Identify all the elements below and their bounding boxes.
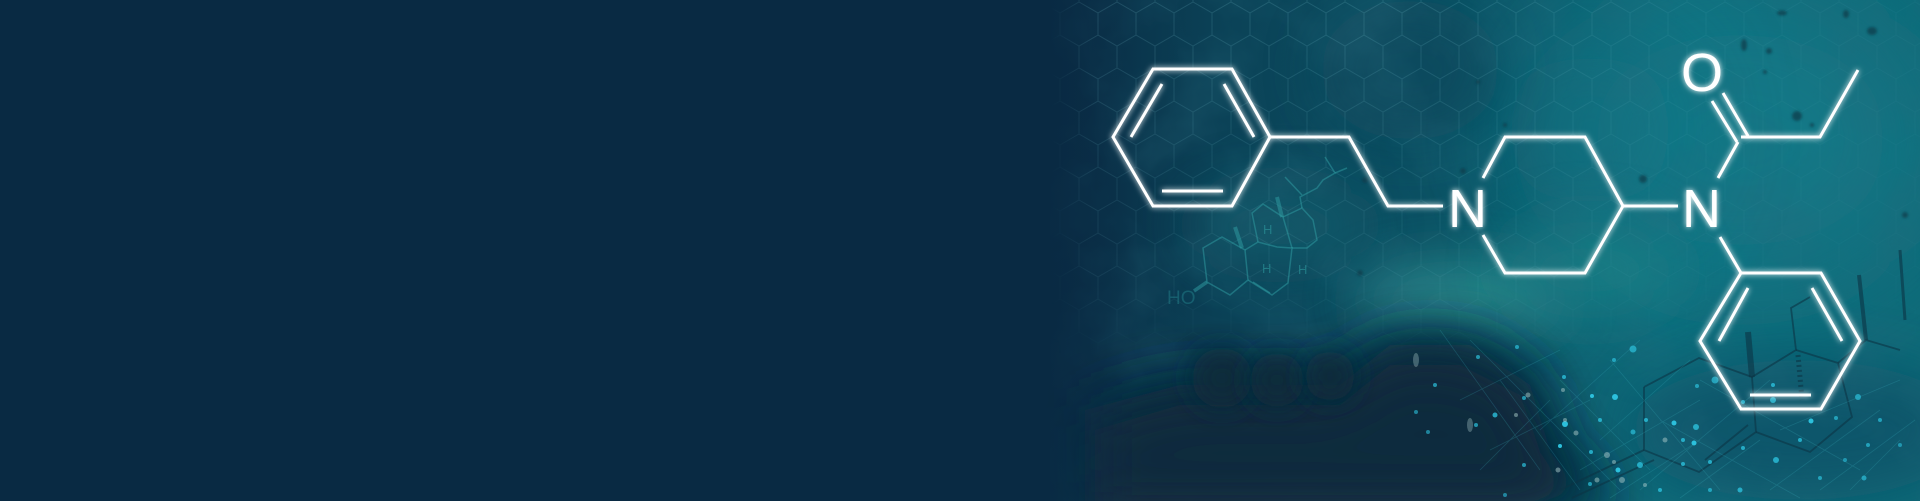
- ethyl linker: [1270, 137, 1443, 206]
- teal smoke background: [1050, 0, 1920, 501]
- dark background molecule: [1560, 250, 1905, 498]
- pale particle highlights: [1413, 353, 1668, 487]
- steroid atom labels: H: [1263, 222, 1272, 237]
- atom labels: [1448, 43, 1723, 239]
- atom labels: N: [1448, 179, 1487, 239]
- steroid atom labels: HO: [1167, 288, 1196, 309]
- propionyl chain: [1741, 70, 1858, 137]
- dark smoke cloud: [1085, 345, 1610, 501]
- bond to lower phenyl: [1720, 237, 1741, 273]
- steroid atom labels: H: [1262, 261, 1271, 276]
- dark specks: [1357, 10, 1908, 276]
- atom labels: O: [1681, 43, 1723, 103]
- particle dots: [1414, 345, 1902, 497]
- faded steroid molecule: [1167, 157, 1347, 309]
- piperidine ring: [1483, 137, 1623, 273]
- amide bond: [1718, 142, 1738, 178]
- banner illustration: [1061, 0, 1920, 501]
- steroid atom labels: H: [1298, 262, 1307, 277]
- carbonyl double bond: [1712, 93, 1748, 142]
- left edge fade into navy: [1040, 0, 1140, 501]
- phenyl ring left: [1113, 69, 1270, 206]
- bond to amide nitrogen: [1623, 204, 1678, 208]
- atom labels: N: [1682, 179, 1721, 239]
- network lines: [1440, 330, 1915, 498]
- steroid atom labels: [1167, 222, 1307, 309]
- hexagon grid: [1064, 0, 1702, 305]
- phenyl ring lower right: [1700, 273, 1860, 409]
- fentanyl structural formula: [1113, 43, 1860, 409]
